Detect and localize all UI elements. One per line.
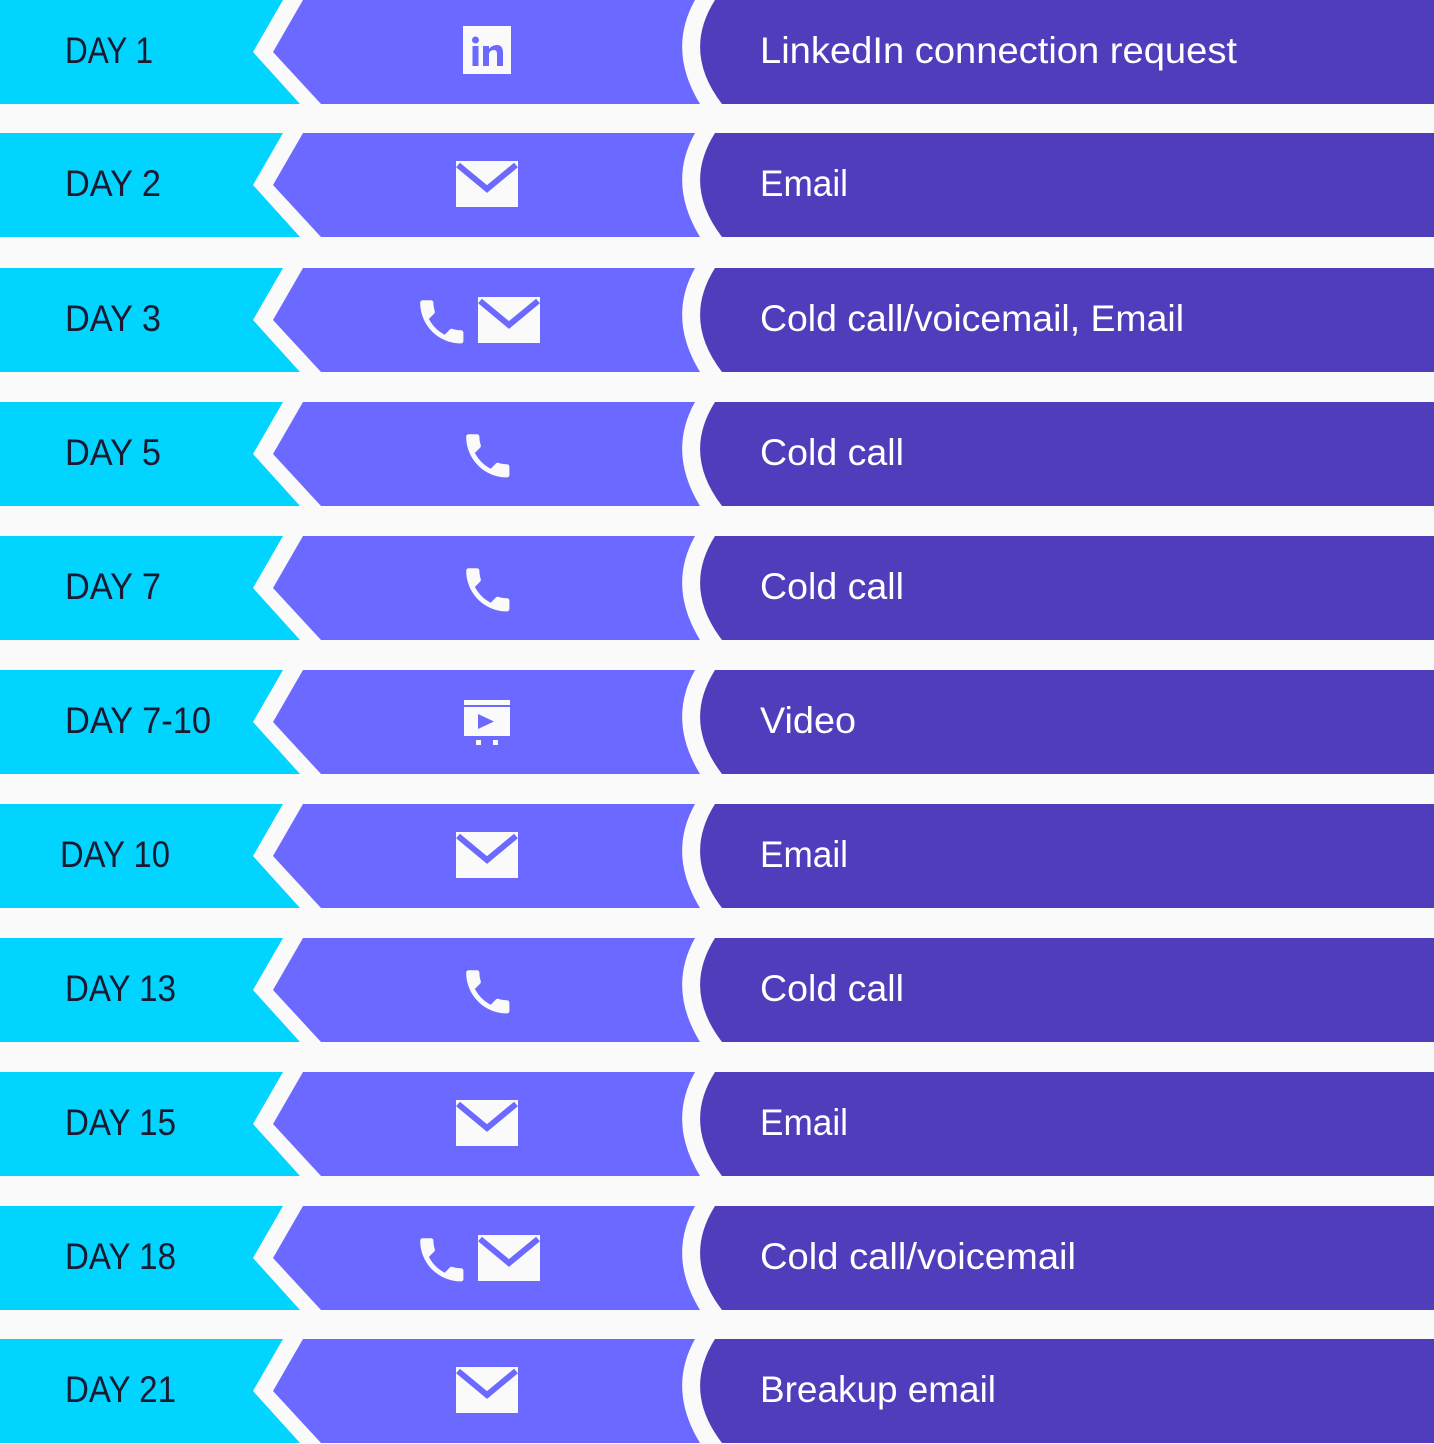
- label: day 2: DAY 2: [65, 163, 161, 204]
- text: cold call: Cold call: [760, 968, 904, 1009]
- text: email: Email: [760, 834, 848, 875]
- label: day 13: DAY 13: [65, 968, 176, 1009]
- icon: phone: [466, 434, 509, 477]
- text: cold call: Cold call: [760, 432, 904, 473]
- row: day 13: [0, 938, 1434, 1042]
- label: day 10: DAY 10: [60, 834, 170, 875]
- icon: phone: [420, 1238, 463, 1281]
- text: breakup email: Breakup email: [760, 1369, 996, 1410]
- row: day 7: [0, 536, 1434, 640]
- label: day 5: DAY 5: [65, 432, 161, 473]
- text: email: Email: [760, 1102, 848, 1143]
- row: day 7-10: [0, 670, 1434, 774]
- label: day 7: DAY 7: [65, 566, 161, 607]
- icon: linkedin: [463, 26, 511, 74]
- icon: video: [464, 700, 510, 745]
- label: day 1: DAY 1: [65, 30, 153, 71]
- icon: email: [456, 832, 518, 878]
- icon: phone: [420, 300, 463, 343]
- row: day 21: [0, 1339, 1434, 1443]
- text: linkedin: LinkedIn connection request: [760, 30, 1238, 71]
- row: day 2: [0, 133, 1434, 237]
- text: video: Video: [760, 700, 856, 741]
- icon: phone: [466, 568, 509, 611]
- row: day 5: [0, 402, 1434, 506]
- text: cold call voicemail email: Cold call/voicemail, Email: [760, 298, 1184, 339]
- icon: email: [456, 1367, 518, 1413]
- row: day 18: [0, 1206, 1434, 1310]
- row: day 15: [0, 1072, 1434, 1176]
- icon: phone: [466, 970, 509, 1013]
- icon: email: [478, 1235, 540, 1281]
- text: cold call: Cold call: [760, 566, 904, 607]
- label: day 15: DAY 15: [65, 1102, 176, 1143]
- icon: email: [456, 1100, 518, 1146]
- label: day 7-10: DAY 7-10: [65, 700, 211, 741]
- icon: email: [478, 297, 540, 343]
- label: day 21: DAY 21: [65, 1369, 176, 1410]
- label: day 18: DAY 18: [65, 1236, 176, 1277]
- icon: email: [456, 161, 518, 207]
- row: day 10: [0, 804, 1434, 908]
- text: email: Email: [760, 163, 848, 204]
- row: day 1: [0, 0, 1434, 104]
- row: day 3: [0, 268, 1434, 372]
- text: cold call voicemail: Cold call/voicemail: [760, 1236, 1076, 1277]
- label: day 3: DAY 3: [65, 298, 161, 339]
